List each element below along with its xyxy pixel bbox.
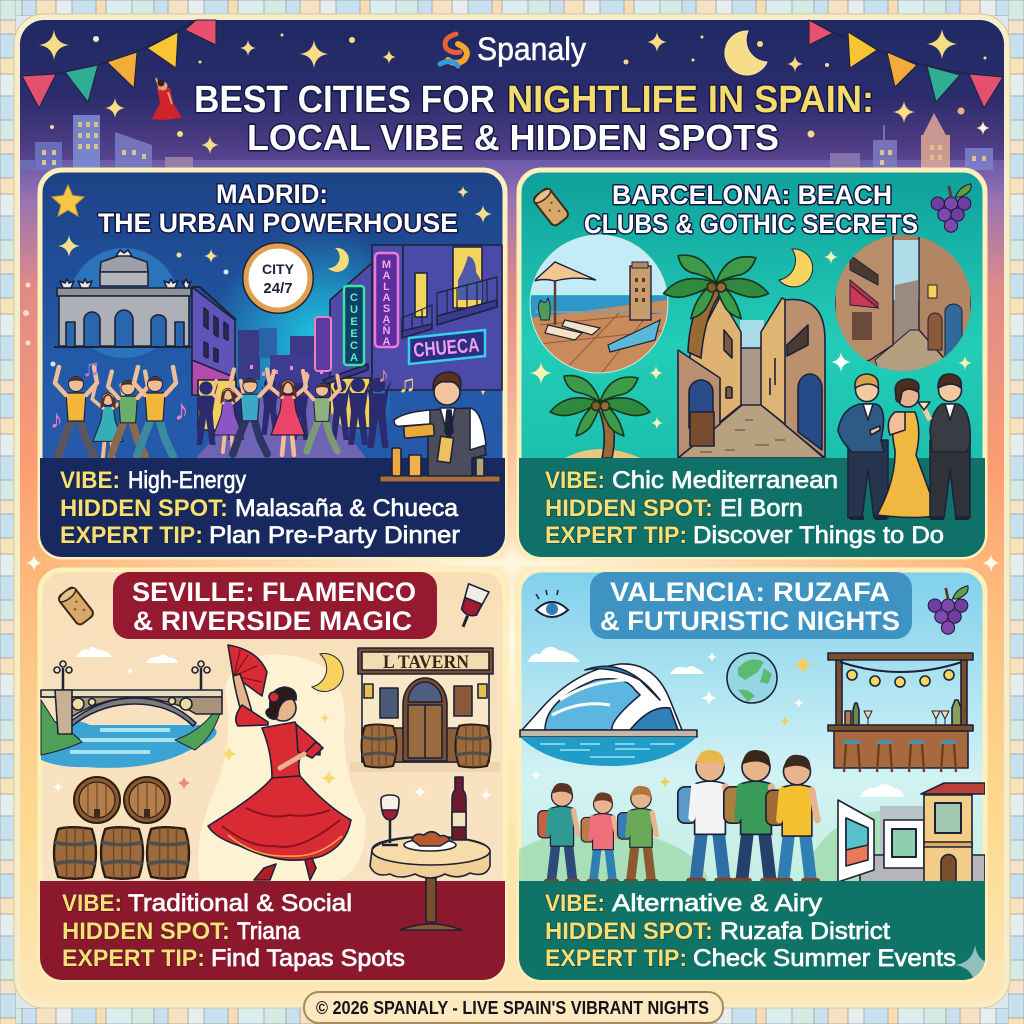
barrels stack xyxy=(54,777,189,879)
medieval street xyxy=(678,297,825,458)
panel facts: VIBE: xyxy=(62,890,122,917)
panel title: BARCELONA: BEACH xyxy=(612,180,892,210)
title: NIGHTLIFE IN SPAIN: xyxy=(507,79,874,121)
clouds xyxy=(528,647,904,797)
globe xyxy=(727,653,777,703)
bar pavilion xyxy=(828,653,973,772)
title xyxy=(194,79,874,158)
stars xyxy=(53,667,492,801)
icon: eye xyxy=(536,590,568,617)
info band xyxy=(519,881,985,981)
clouds xyxy=(76,647,178,663)
skyline xyxy=(20,113,993,170)
icon: grapes xyxy=(931,184,971,232)
panel facts: El Born xyxy=(720,495,803,522)
panel facts: Malasaña & Chueca xyxy=(235,495,459,522)
panel facts: Plan Pre-Party Dinner xyxy=(209,522,460,549)
icon: cork xyxy=(57,586,95,626)
panel facts: Find Tapas Spots xyxy=(211,945,405,972)
logo: Spanaly xyxy=(440,31,586,67)
art galleries xyxy=(838,783,985,882)
panel facts: Alternative & Airy xyxy=(612,890,822,917)
neon sign: small xyxy=(315,317,331,371)
logo icon xyxy=(440,34,467,66)
clock: City 24/7: CITY xyxy=(262,261,295,277)
road xyxy=(196,398,366,458)
panel facts: High-Energy xyxy=(128,467,246,494)
panel title: THE URBAN POWERHOUSE xyxy=(98,208,458,238)
panel facts: Triana xyxy=(237,918,301,945)
sparkle watermark xyxy=(955,945,995,985)
bunting right xyxy=(809,20,1003,108)
footer pill xyxy=(304,992,723,1023)
music notes: ♪ xyxy=(174,394,189,427)
footer pill: © 2026 SPANALY - LIVE SPAIN'S VIBRANT NIGHTS xyxy=(316,998,709,1018)
bar shelf xyxy=(380,476,500,482)
panel facts: HIDDEN SPOT: xyxy=(545,495,713,522)
young travellers xyxy=(538,750,817,881)
stars xyxy=(530,250,972,429)
panel facts: VIBE: xyxy=(545,890,605,917)
music notes: ♪ xyxy=(50,404,63,434)
panel facts: EXPERT TIP: xyxy=(62,945,205,972)
hills xyxy=(490,810,980,990)
neon sign: Malasana: MALASAÑA xyxy=(382,259,391,348)
cream glow behind dancer xyxy=(198,655,366,885)
stars xyxy=(531,652,813,788)
moon xyxy=(725,31,767,75)
icon: wine glass xyxy=(453,584,489,631)
left street building xyxy=(192,287,236,430)
small palm on island xyxy=(550,376,650,458)
flamenco dancer xyxy=(208,645,351,880)
panel facts: Ruzafa District xyxy=(720,918,890,945)
music notes: ♫ xyxy=(398,371,416,398)
panel facts xyxy=(62,890,405,972)
crescent moon xyxy=(779,249,813,287)
tavern xyxy=(350,648,500,772)
left dancers xyxy=(55,367,176,459)
panel title: MADRID: xyxy=(216,179,328,209)
neon sign: Malasana xyxy=(375,253,398,348)
distant city xyxy=(238,328,330,398)
panel facts xyxy=(545,467,944,549)
clock: City 24/7 xyxy=(243,243,313,313)
crowd silhouettes xyxy=(193,378,392,448)
Puerta de Alcala gate xyxy=(54,250,197,347)
header stars xyxy=(23,29,1000,572)
bridge and river xyxy=(41,661,222,768)
music notes: ♪ xyxy=(378,362,389,387)
tavern: L TAVERN xyxy=(383,652,469,673)
icon: flamenco dancer emoji xyxy=(152,78,182,120)
panel title: SEVILLE: FLAMENCO xyxy=(132,577,416,607)
icon: grapes xyxy=(928,586,968,634)
gate moon disc xyxy=(69,248,179,358)
info band xyxy=(519,458,985,558)
elegant trio xyxy=(838,374,970,518)
panel: Seville xyxy=(40,570,505,981)
panel facts: EXPERT TIP: xyxy=(60,522,203,549)
panel title xyxy=(584,180,918,239)
tall palm xyxy=(664,255,768,358)
panel title: & FUTURISTIC NIGHTS xyxy=(600,606,900,636)
stars xyxy=(50,186,492,396)
info band xyxy=(40,458,505,558)
bunting left xyxy=(22,20,216,108)
panel facts: Check Summer Events xyxy=(693,945,956,972)
crescent moon xyxy=(328,248,349,272)
panel title xyxy=(113,572,437,639)
panel title: VALENCIA: RUZAFA xyxy=(610,577,890,607)
panel title xyxy=(98,179,458,238)
panel: Madrid xyxy=(40,170,505,558)
panel facts: Discover Things to Do xyxy=(693,522,944,549)
panel facts: EXPERT TIP: xyxy=(545,522,687,549)
City of Arts and Sciences xyxy=(520,664,697,766)
panel: Barcelona xyxy=(519,170,985,558)
panel facts: Traditional & Social xyxy=(128,890,352,917)
panel facts xyxy=(545,890,956,972)
table with tapas and wine xyxy=(370,777,490,930)
clock: City 24/7: 24/7 xyxy=(263,280,293,297)
panel facts xyxy=(60,467,460,549)
neon sign: Chueca vertical xyxy=(344,286,364,365)
panel facts: Chic Mediterranean xyxy=(612,467,838,494)
gothic alley circle xyxy=(835,235,971,375)
panel facts: VIBE: xyxy=(60,467,120,494)
bartender xyxy=(392,372,486,476)
panel facts: HIDDEN SPOT: xyxy=(545,918,713,945)
panel: Valencia xyxy=(490,570,995,990)
panel facts: HIDDEN SPOT: xyxy=(62,918,230,945)
title: BEST CITIES FOR xyxy=(194,79,495,121)
crescent moon xyxy=(312,654,343,692)
panel title xyxy=(590,572,912,639)
neon sign: Chueca horizontal: CHUECA xyxy=(413,334,480,362)
panel title: CLUBS & GOTHIC SECRETS xyxy=(584,209,918,239)
music notes: ♫ xyxy=(82,355,100,382)
music notes xyxy=(52,362,413,428)
title: LOCAL VIBE & HIDDEN SPOTS xyxy=(247,117,779,158)
logo wordmark: Spanaly xyxy=(477,31,586,67)
panel facts: EXPERT TIP: xyxy=(545,945,687,972)
panel title: & RIVERSIDE MAGIC xyxy=(133,606,412,636)
beach terrace circle xyxy=(530,235,668,375)
neon sign: Chueca vertical: CUEECA xyxy=(350,292,358,364)
panel facts: HIDDEN SPOT: xyxy=(60,495,228,522)
street dancers xyxy=(213,370,340,455)
gold star xyxy=(52,185,84,216)
icon: cork xyxy=(532,187,570,227)
right street buildings xyxy=(323,245,502,428)
panel facts: VIBE: xyxy=(545,467,605,494)
info band xyxy=(40,881,505,981)
